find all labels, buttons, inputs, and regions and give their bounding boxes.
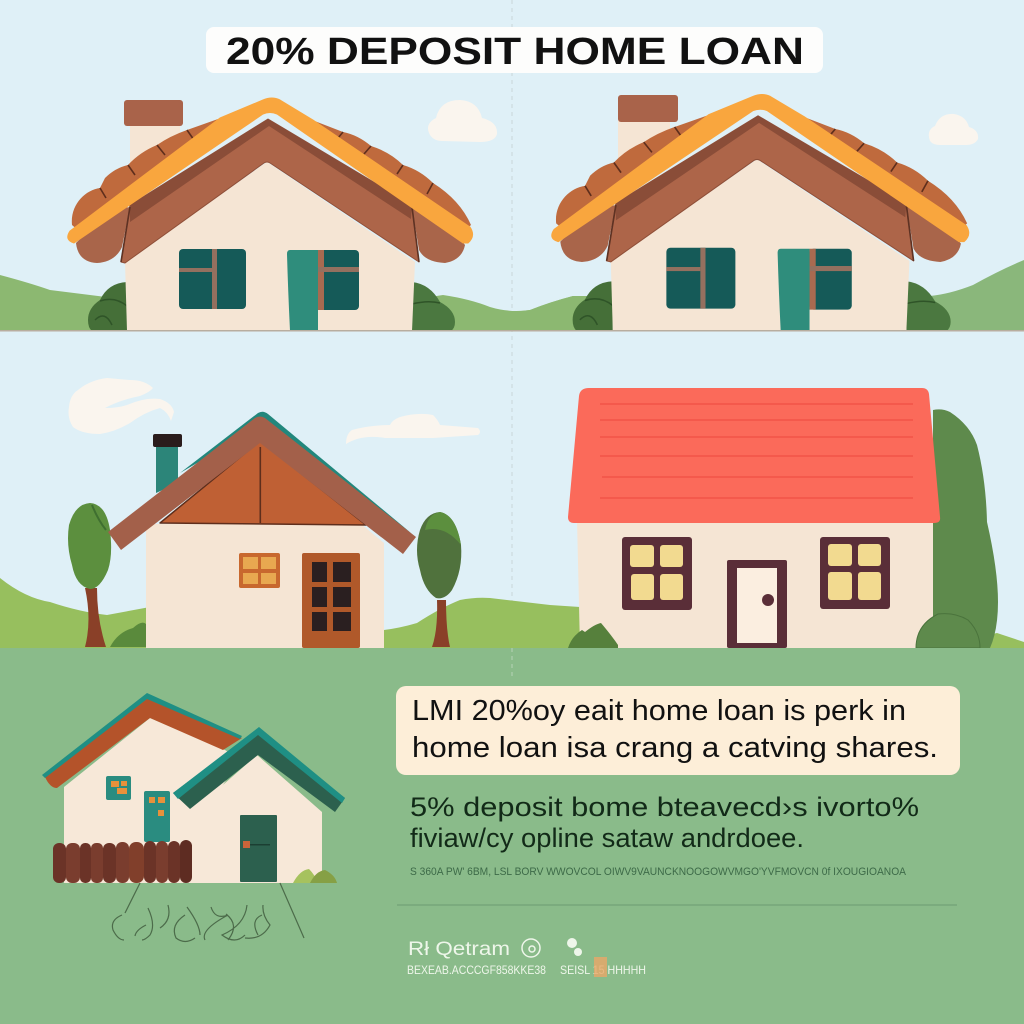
icon: small camera doodle (522, 939, 540, 957)
door (240, 815, 277, 882)
window (239, 553, 280, 588)
cloud (929, 114, 978, 145)
window right (820, 537, 890, 609)
small house illustration (42, 693, 345, 942)
body text: 5% deposit bome bteavecd›s ivorto% (410, 792, 919, 822)
cloud (428, 100, 497, 142)
wing roof (173, 730, 345, 812)
footer left: BEXEAB.ACCCGF858KKE38 (407, 963, 546, 977)
cloud (68, 378, 174, 434)
main roof (45, 698, 242, 788)
eave lobes (76, 207, 465, 263)
body text: fiviaw/cy opline sataw andrdoee. (410, 823, 804, 853)
body text (410, 792, 919, 853)
wing wall (192, 755, 322, 883)
red roof (568, 388, 940, 523)
chimney (618, 95, 678, 165)
callout box (396, 686, 960, 775)
fence (53, 840, 192, 883)
house wall (125, 162, 415, 331)
door and window (287, 250, 359, 331)
panel: green lower section (0, 648, 1024, 1024)
main wall (64, 718, 240, 883)
gable (160, 441, 366, 525)
footer left (407, 939, 546, 977)
roof tiles (72, 119, 471, 235)
footer right (560, 938, 646, 977)
panel: mid-left house (0, 378, 580, 648)
window (179, 249, 246, 309)
small door (144, 791, 170, 842)
window (106, 776, 131, 800)
footer left: Rł Qetram (408, 939, 510, 960)
title: 20% DEPOSIT HOME LOAN (226, 31, 804, 73)
fine print: S 360A PW' 6BM, LSL BORV WWOVCOL OIWV9VAUNCKNOOGOWVMGO'YVFMOVCN 0f IXOUGIOANOA (410, 866, 907, 878)
door (727, 560, 787, 648)
cloud (346, 414, 480, 444)
wall (577, 520, 933, 648)
panel: top-right house (512, 94, 1024, 332)
tall tree (933, 409, 998, 648)
house 2 artwork (552, 94, 969, 331)
bushes (568, 614, 980, 648)
chimney (124, 100, 183, 167)
tree right (417, 512, 461, 647)
chimney (153, 434, 182, 493)
callout box: LMI 20%oy eait home loan is perk in (412, 695, 906, 727)
bushes (293, 869, 337, 883)
bush (110, 623, 158, 647)
orange roof band (68, 98, 473, 243)
tree left (68, 503, 111, 647)
footer right: SEISL 15 HHHHH (560, 963, 646, 977)
house wall (146, 524, 384, 648)
panel: mid-right house (568, 388, 1024, 648)
panel: top-left house (0, 98, 600, 332)
bushes (88, 282, 455, 331)
door (302, 553, 360, 648)
sketch squiggles and arrows (112, 883, 304, 942)
window left (622, 537, 692, 610)
gable (121, 119, 419, 263)
callout box: home loan isa crang a catving shares. (412, 732, 938, 764)
roof (108, 412, 416, 554)
